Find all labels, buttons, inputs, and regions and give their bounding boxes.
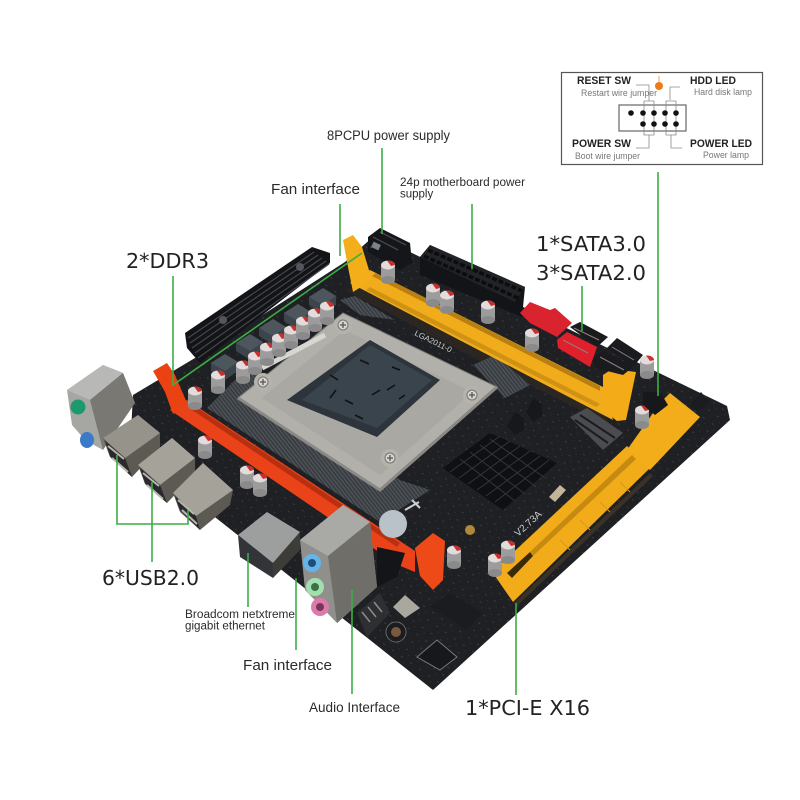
label: 24-pin power: 24p motherboard power	[400, 177, 525, 189]
PS/2 port	[67, 365, 135, 450]
heading: reset switch: RESET SW	[577, 75, 632, 87]
label: ethernet: gigabit ethernet	[185, 620, 266, 632]
leader: front panel	[657, 172, 659, 396]
socket hatch: top corner	[340, 296, 395, 320]
PCI-E x16 slot	[493, 393, 700, 606]
leader: audio	[351, 590, 353, 694]
label: SATA counts: 3*SATA2.0	[536, 261, 646, 285]
socket hatch: lower left	[207, 365, 430, 522]
note: power switch: Boot wire jumper	[575, 151, 640, 161]
label: fan interface top: Fan interface	[271, 182, 360, 198]
VRM chokes	[211, 288, 336, 380]
icon: pin header diagram	[619, 85, 686, 148]
label: ethernet: Broadcom netxtreme	[185, 609, 295, 621]
label: USB: 6*USB2.0	[102, 566, 199, 590]
note: HDD: Hard disk lamp	[694, 87, 752, 97]
heading: power LED: POWER LED	[690, 138, 752, 150]
revision marking: V2.73A	[513, 509, 545, 539]
onboard lower components	[357, 392, 710, 670]
leader: SATA	[581, 286, 583, 331]
label: PCI-E: 1*PCI-E X16	[465, 696, 590, 720]
capacitors	[188, 260, 654, 577]
ethernet port	[238, 512, 300, 578]
label: 24-pin power: supply	[400, 188, 433, 200]
leader: CPU power	[381, 148, 383, 234]
SATA connectors	[520, 302, 643, 375]
label: SATA counts: 1*SATA3.0	[536, 232, 646, 256]
label: audio: Audio Interface	[309, 700, 400, 715]
icon: orange pin marker	[655, 76, 663, 90]
leader: ethernet	[247, 553, 249, 607]
socket hatch: right corner	[473, 355, 530, 398]
leader: 24-pin power	[471, 204, 473, 269]
label: fan interface bottom: Fan interface	[243, 658, 332, 674]
leader: USB bracket	[117, 455, 188, 562]
label: DDR3: 2*DDR3	[126, 249, 209, 273]
note: reset: Restart wire jumper	[581, 88, 657, 98]
yellow DDR3 slot	[343, 235, 636, 421]
leader: PCI-E	[515, 603, 517, 695]
heading: HDD LED: HDD LED	[690, 75, 736, 87]
8-pin CPU power connector	[368, 228, 412, 270]
socket marking: LGA2011-0	[413, 329, 454, 355]
red DDR3 slot	[153, 363, 445, 590]
CPU socket	[238, 313, 497, 490]
left VRM heatsink	[185, 247, 330, 363]
brown strip beside socket	[345, 285, 610, 425]
audio block	[300, 505, 405, 623]
note: power lamp: Power lamp	[703, 150, 749, 160]
label: 8P CPU power: 8PCPU power supply	[327, 128, 450, 143]
USB port stacks	[103, 415, 233, 530]
24-pin power connector	[420, 245, 525, 317]
M.2 slot	[507, 398, 623, 450]
chipset heatsink	[443, 433, 557, 510]
motherboard photo	[67, 228, 730, 690]
leader: fan interface bottom	[295, 578, 297, 650]
panel: front panel header pinout	[562, 72, 762, 164]
leader: fan interface top	[339, 204, 341, 256]
board PCB	[130, 235, 730, 690]
leader: DDR3	[173, 253, 362, 385]
heading: power switch: POWER SW	[572, 138, 632, 150]
